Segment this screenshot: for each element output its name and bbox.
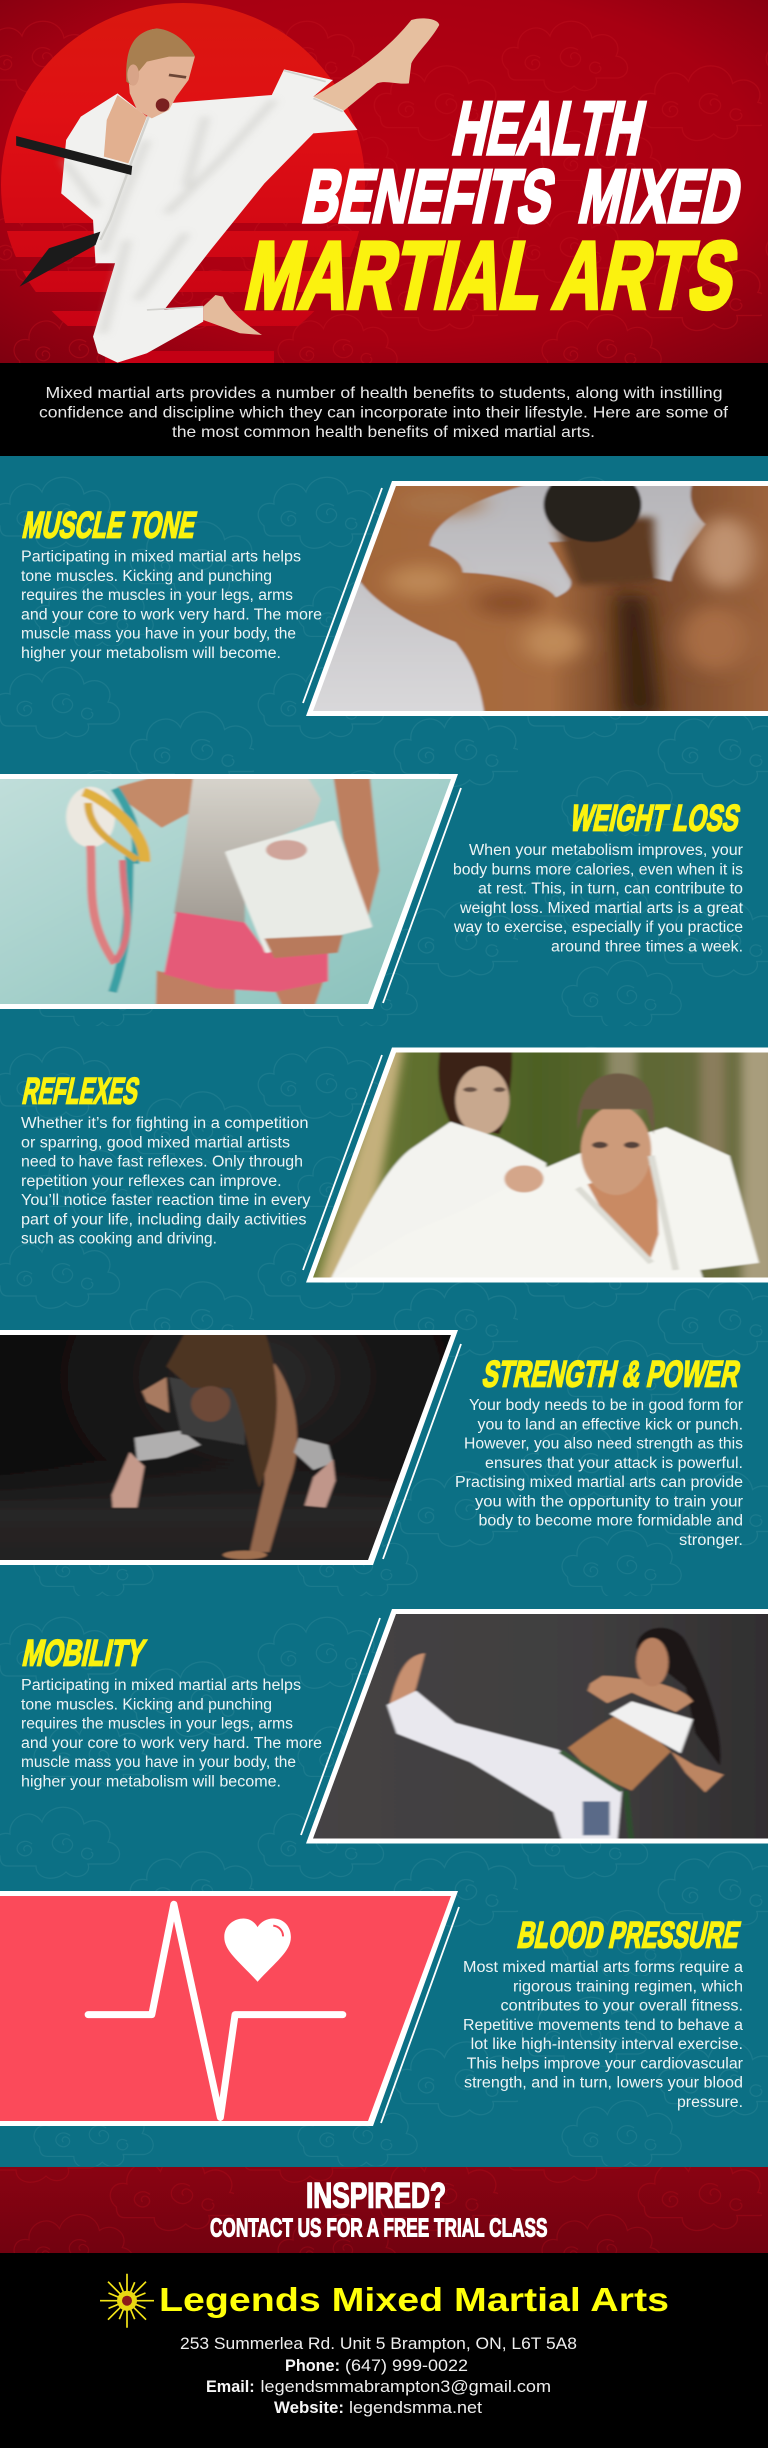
text: weight loss: around three times a week. <box>551 938 743 955</box>
text: strength and power: ensures that your attack is powerful. <box>485 1455 743 1472</box>
title: HEALTH <box>446 87 652 171</box>
text: strength and power: Your body needs to be in good form for <box>469 1397 743 1414</box>
text: mobility: higher your metabolism will become. <box>21 1773 281 1790</box>
call to action band <box>0 2167 768 2253</box>
text: blood pressure: This helps improve your cardiovascular <box>467 2055 743 2072</box>
text: mobility: Participating in mixed martial arts helps <box>21 1677 301 1694</box>
intro band: the most common health benefits of mixed martial arts. <box>172 424 595 441</box>
text: muscle tone <box>21 548 322 662</box>
text: strength and power: Practising mixed martial arts can provide <box>455 1474 743 1491</box>
contact details: 253 Summerlea Rd. Unit 5 Brampton, ON, L6T 5A8 <box>180 2335 577 2353</box>
text: blood pressure: contributes to your overall fitness. <box>500 1998 743 2014</box>
text: mobility <box>21 1677 322 1790</box>
photo: muscular back <box>302 481 768 716</box>
icon: heart <box>224 1919 291 1982</box>
panel: strength and power <box>0 1324 744 1574</box>
text: weight loss: weight loss. Mixed martial arts is a great <box>459 900 744 917</box>
text: reflexes: or sparring, good mixed martial artists <box>21 1134 290 1151</box>
icon: ecg line <box>88 1904 343 2117</box>
text: blood pressure: Repetitive movements tend to behave a <box>463 2017 743 2034</box>
text: weight loss: way to exercise, especially if you practice <box>453 919 743 936</box>
contact details: (647) 999-0022 <box>345 2357 468 2375</box>
text: mobility: tone muscles. Kicking and punching <box>21 1696 272 1713</box>
heading: mobility: MOBILITY <box>19 1632 149 1673</box>
text: reflexes: such as cooking and driving. <box>21 1230 217 1248</box>
text: strength and power <box>455 1397 743 1549</box>
text: blood pressure: strength, and in turn, lowers your blood <box>464 2074 743 2092</box>
text: reflexes: You’ll notice faster reaction time in every <box>21 1192 311 1209</box>
panel: muscle tone <box>19 467 768 724</box>
logo wordmark: Legends Mixed Martial Arts <box>159 2281 669 2318</box>
text: blood pressure: Most mixed martial arts forms require a <box>463 1959 743 1976</box>
heading: muscle tone: MUSCLE TONE <box>19 504 200 545</box>
photo: woman high kick <box>294 1601 768 1851</box>
text: strength and power: However, you also need strength as this <box>464 1436 743 1452</box>
photo: woman doing one-arm push-up <box>0 1324 470 1574</box>
panel: blood pressure <box>0 1891 744 2126</box>
text: muscle tone: tone muscles. Kicking and punching <box>21 568 272 585</box>
text: reflexes: repetition your reflexes can improve. <box>21 1173 282 1190</box>
panel: mobility <box>19 1601 768 1851</box>
text: reflexes: Whether it’s for fighting in a competition <box>21 1115 308 1132</box>
text: mobility: and your core to work very hard. The more <box>21 1735 322 1752</box>
text: blood pressure: pressure. <box>677 2094 743 2111</box>
text: mobility: muscle mass you have in your body, the <box>21 1754 296 1771</box>
call to action band: INSPIRED? <box>306 2176 446 2216</box>
text: muscle tone: muscle mass you have in your body, the <box>21 626 296 642</box>
text: muscle tone: requires the muscles in your legs, arms <box>21 587 293 604</box>
title <box>238 87 749 329</box>
photo: two martial artists in white gi <box>294 1041 768 1291</box>
text: strength and power: stronger. <box>679 1532 743 1549</box>
intro band: Mixed martial arts provides a number of health benefits to students, along with instilling <box>46 385 723 402</box>
text: muscle tone: higher your metabolism will become. <box>21 645 281 662</box>
call to action band: CONTACT US FOR A FREE TRIAL CLASS <box>210 2212 548 2242</box>
contact details: legendsmmabrampton3@gmail.com <box>260 2378 551 2396</box>
contact details <box>180 2335 577 2417</box>
contact details: legendsmma.net <box>349 2399 482 2417</box>
rising sun with stripes <box>1 3 365 367</box>
text: strength and power: body to become more formidable and <box>478 1512 743 1530</box>
martial artist kicking <box>16 18 439 363</box>
graphic: heartbeat and heart <box>0 1891 459 2126</box>
contact details: Email: <box>206 2378 255 2396</box>
intro band: confidence and discipline which they can incorporate into their lifestyle. Here are some of <box>39 404 729 422</box>
text: weight loss: at rest. This, in turn, can contribute to <box>478 880 743 898</box>
text: mobility: requires the muscles in your legs, arms <box>21 1716 293 1732</box>
text: reflexes: need to have fast reflexes. Only through <box>21 1154 303 1170</box>
intro band <box>0 363 768 456</box>
photo: woman with scale and tape <box>0 767 470 1017</box>
text: muscle tone: and your core to work very hard. The more <box>21 606 322 623</box>
footer <box>0 2253 768 2448</box>
panel: weight loss <box>0 767 744 1017</box>
text: weight loss <box>453 842 744 955</box>
text: blood pressure <box>463 1959 743 2111</box>
contact details: Phone: <box>285 2357 340 2375</box>
panel: reflexes <box>19 1041 768 1291</box>
text: blood pressure: lot like high-intensity interval exercise. <box>471 2036 743 2053</box>
header banner <box>0 0 768 367</box>
text: muscle tone: Participating in mixed martial arts helps <box>21 548 301 566</box>
text: weight loss: When your metabolism improves, your <box>469 842 743 859</box>
text: strength and power: you to land an effective kick or punch. <box>478 1416 743 1433</box>
text: weight loss: body burns more calories, even when it is <box>453 861 743 878</box>
text: blood pressure: rigorous training regimen, which <box>513 1978 743 1995</box>
text: reflexes: part of your life, including daily activities <box>21 1211 307 1228</box>
teal patterned background <box>0 456 768 2167</box>
heading: reflexes: REFLEXES <box>19 1070 143 1111</box>
text: reflexes <box>21 1115 311 1248</box>
icon: starburst logo <box>100 2274 154 2328</box>
text: strength and power: you with the opportunity to train your <box>475 1493 743 1510</box>
contact details: Website: <box>274 2399 344 2417</box>
